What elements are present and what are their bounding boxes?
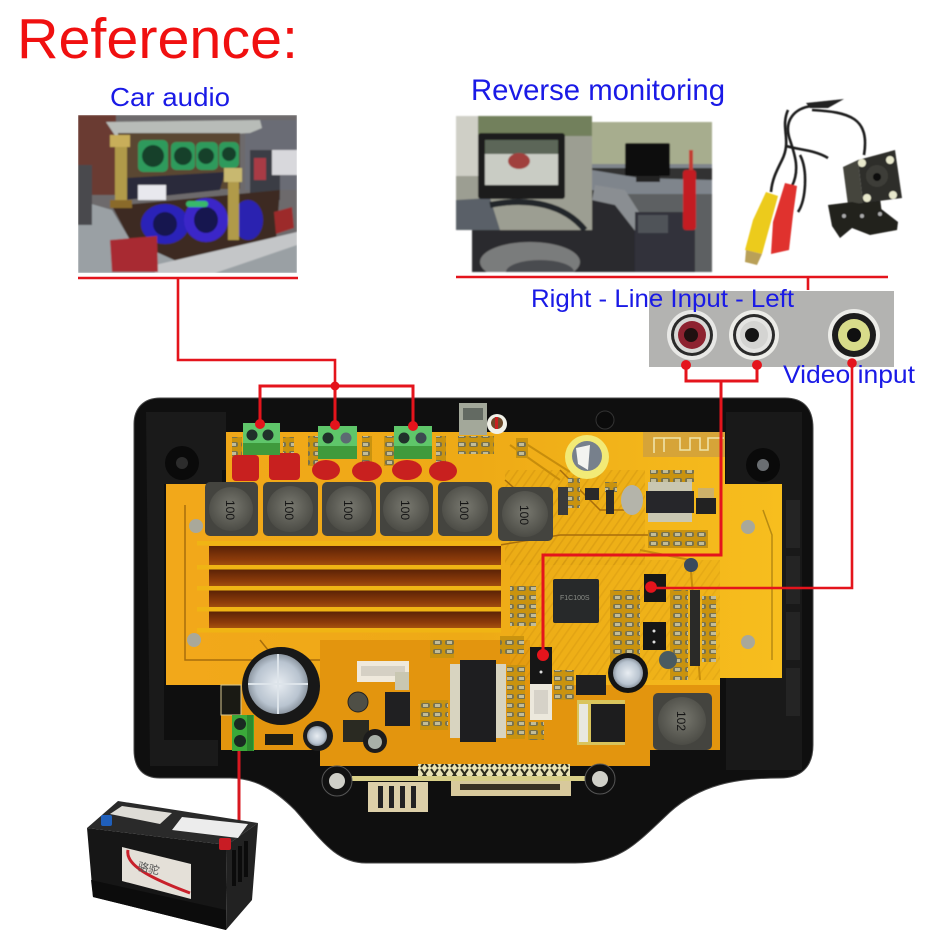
amplifier housing xyxy=(134,398,813,863)
smd rows: top xyxy=(232,436,708,548)
photo: dashboard with reverse monitor xyxy=(456,116,712,284)
large electrolytic capacitor xyxy=(242,647,320,725)
label: line input: Right - Line Input - Left xyxy=(531,285,794,313)
wiring: line input xyxy=(538,362,760,660)
capacitor: small right xyxy=(363,729,387,753)
jumper: line input header xyxy=(530,647,552,684)
board: lower orange area xyxy=(221,640,720,766)
photo: car trunk with speakers xyxy=(78,115,297,273)
socket: left line input xyxy=(729,310,779,360)
wiring: speaker outputs xyxy=(256,383,416,430)
main chips: F1C100S xyxy=(560,595,590,602)
connector block: bottom xyxy=(352,764,592,812)
wiring: video input xyxy=(646,360,856,592)
mount: left boss xyxy=(165,446,199,480)
power terminal xyxy=(232,715,254,751)
inductor 4: 100 xyxy=(398,500,412,520)
coin capacitor xyxy=(565,435,609,479)
photo: reversing camera with RCA plugs xyxy=(745,99,902,265)
connector line: reverse monitoring to video xyxy=(456,277,888,290)
board outline xyxy=(166,432,782,766)
title: Reference: xyxy=(17,7,298,71)
car battery xyxy=(87,801,258,930)
inductor 5: 100 xyxy=(457,500,471,520)
wiring: battery to power terminal xyxy=(238,751,240,822)
inductor 5 xyxy=(438,482,492,536)
screws: board xyxy=(187,519,755,796)
inductor 6 xyxy=(498,487,553,541)
main chips xyxy=(430,482,716,680)
heading: reverse monitoring: Reverse monitoring xyxy=(471,74,725,107)
heading: car audio: Car audio xyxy=(110,82,230,112)
speaker terminal 1 xyxy=(243,423,280,455)
terminal: positive xyxy=(219,838,231,850)
inductor 1: 100 xyxy=(223,500,237,520)
heat sink xyxy=(197,541,501,632)
capacitor: audio output xyxy=(608,653,648,693)
power ICs and lower parts xyxy=(265,660,625,745)
inductor 3: 100 xyxy=(341,500,355,520)
inductor 2: 100 xyxy=(282,500,296,520)
label: video input: Video input xyxy=(783,361,915,389)
bluetooth antenna xyxy=(643,432,725,457)
socket: video input xyxy=(828,309,880,361)
socket: right line input xyxy=(667,310,717,360)
inductor 6: 100 xyxy=(517,505,531,525)
inductor 4 xyxy=(380,482,433,536)
component: indicator xyxy=(487,414,507,434)
component: voltage regulator xyxy=(459,403,487,435)
inductor: power: 102 xyxy=(674,711,688,731)
speaker terminal 2 xyxy=(318,426,357,459)
inductor 1 xyxy=(205,482,258,536)
terminal: negative xyxy=(101,815,112,826)
red capacitors xyxy=(232,453,457,481)
inductor 3 xyxy=(322,482,376,536)
jumper: spare header xyxy=(643,622,666,650)
capacitor: small left xyxy=(303,721,333,751)
mount: right boss xyxy=(746,448,780,482)
panel: RCA input sockets xyxy=(649,291,894,367)
inductor: power xyxy=(653,693,712,750)
speaker terminal 3 xyxy=(394,426,432,459)
inductor 2 xyxy=(263,482,318,536)
white connector: audio xyxy=(530,684,552,720)
circuit board xyxy=(166,403,782,812)
connector line: car audio to speaker terminals xyxy=(78,278,335,386)
car battery: 骆驼 xyxy=(136,859,161,878)
jumper: video input header xyxy=(644,574,666,602)
white connector: four pin xyxy=(357,661,409,682)
